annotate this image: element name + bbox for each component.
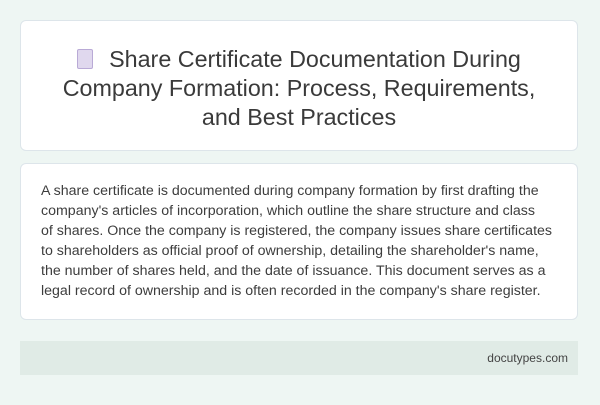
description text	[41, 183, 552, 299]
description text: the number of shares held, and the date of issuance. This document serves as a	[41, 263, 545, 279]
title card	[20, 20, 578, 151]
description text: A share certificate is documented during company formation by first drafting the	[41, 183, 539, 199]
description text: of shares. Once the company is registered, the company issues share certificates	[41, 223, 552, 239]
footer text: docutypes.com	[487, 351, 568, 365]
title: Share Certificate Documentation During Company Formation: Process, Requirements, and Best Practices	[63, 46, 535, 130]
description text: company's articles of incorporation, which outline the share structure and class	[41, 203, 535, 219]
description text: legal record of ownership and is often recorded in the company's share register.	[41, 283, 541, 299]
description card	[20, 163, 578, 320]
footer bar	[20, 341, 578, 375]
description text: to shareholders as official proof of ownership, detailing the shareholder's name,	[41, 243, 539, 259]
icon: document	[77, 49, 93, 69]
